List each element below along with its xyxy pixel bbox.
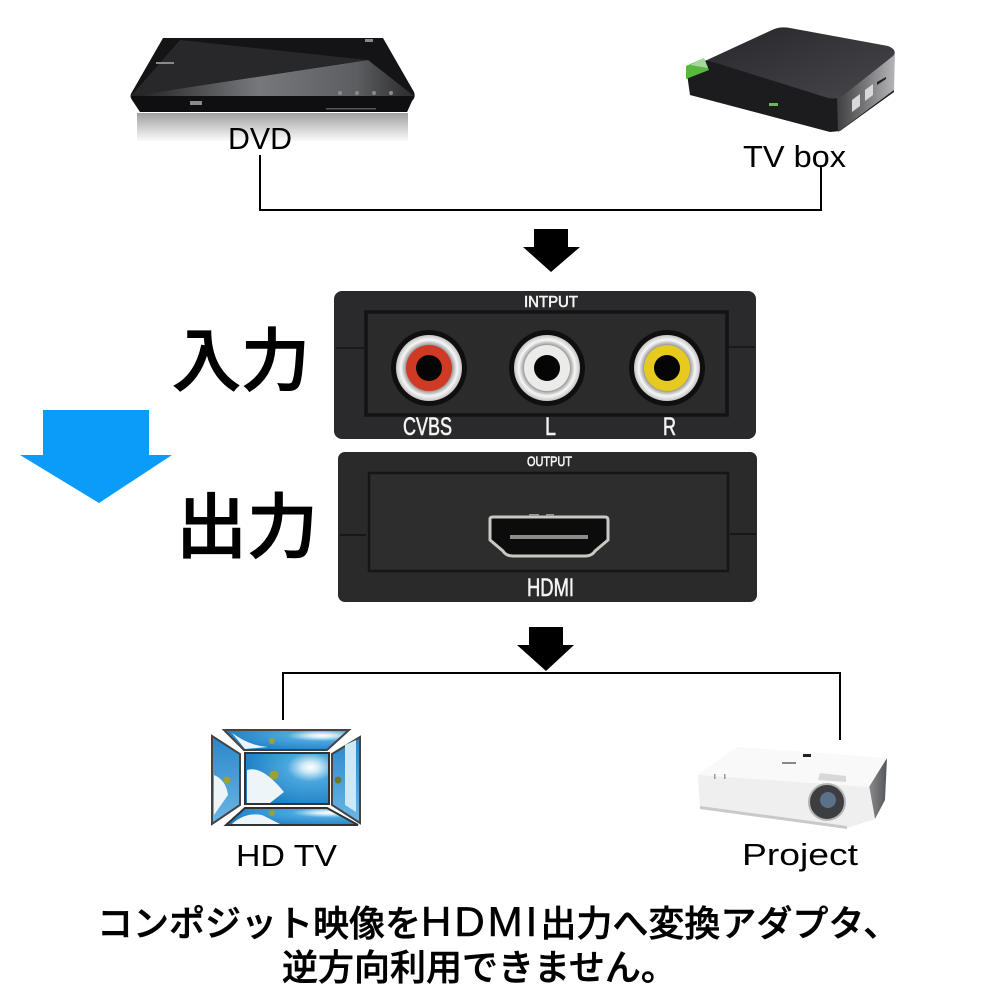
label: HDMI: HDMI <box>527 574 574 602</box>
caption: 逆方向利用できません。 <box>282 939 677 991</box>
icon: projector <box>698 747 887 829</box>
icon: DVD player <box>130 38 415 141</box>
panel: output side of adapter <box>338 452 757 602</box>
port: HDMI <box>490 514 608 556</box>
arrow: blue direction <box>20 410 172 503</box>
heading: input: 入力 <box>172 305 310 405</box>
label: OUTPUT: OUTPUT <box>527 453 572 469</box>
panel: input side of adapter <box>334 291 756 441</box>
icon: HD TV wall <box>212 730 360 825</box>
heading: output: 出力 <box>176 471 318 573</box>
jack: yellow <box>629 330 705 406</box>
label: HD TV: HD TV <box>236 838 337 873</box>
label: Project: Project <box>742 837 858 872</box>
connector: adapter to displays <box>283 673 840 740</box>
jack: red <box>391 330 467 406</box>
label: INTPUT: INTPUT <box>524 294 578 311</box>
label: R: R <box>663 413 676 441</box>
label: TV box: TV box <box>743 139 847 174</box>
label: CVBS: CVBS <box>403 413 452 441</box>
caption <box>97 895 899 991</box>
connector: sources to adapter <box>260 155 821 210</box>
caption: コンポジット映像をHDMI出力へ変換アダプタ、 <box>97 895 899 947</box>
label: L: L <box>545 413 556 441</box>
icon: TV box <box>686 27 895 132</box>
jack: white <box>509 330 585 406</box>
arrow: down into input <box>523 229 580 272</box>
arrow: down from output <box>517 627 574 671</box>
label: DVD: DVD <box>228 121 292 156</box>
